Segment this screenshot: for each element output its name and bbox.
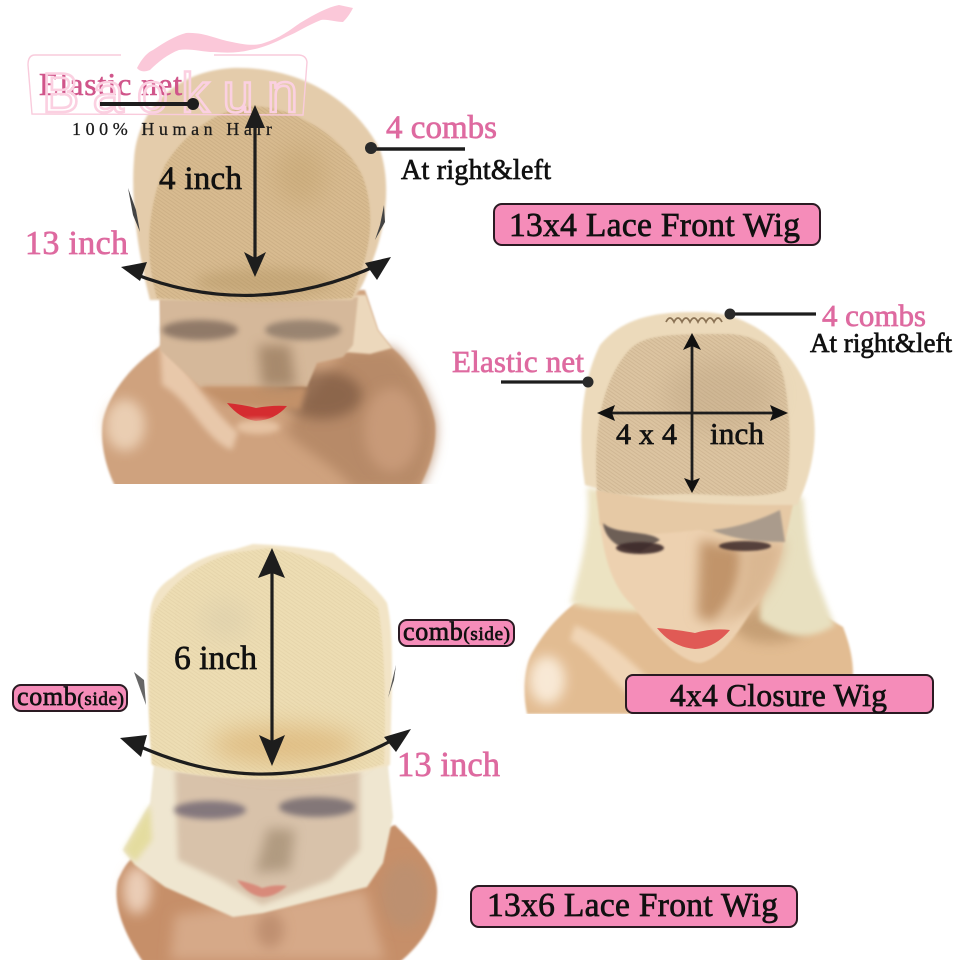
label: 4x4 Closure Wig: 4x4 Closure Wig <box>670 678 887 713</box>
arrow: 13 inch curved, 13x6 <box>120 729 411 774</box>
text: At right&left 4x4: At right&left <box>810 328 952 358</box>
text: inch: inch <box>710 416 764 451</box>
callout line: 4x4 combs <box>724 308 816 320</box>
logo swoosh <box>137 5 353 71</box>
label: 4x4 Closure Wig <box>626 675 933 713</box>
arrow: 13 inch curved <box>121 257 391 295</box>
arrow: 4x4 vertical <box>683 333 701 493</box>
icon: comb teeth <box>666 318 722 322</box>
text: At right&left: At right&left <box>401 155 551 186</box>
callout line: combs <box>365 142 465 154</box>
text: 4 x 4: 4 x 4 <box>616 418 677 451</box>
callout line: elastic net 4x4 <box>501 376 594 388</box>
text: 13 inch pink, 13x6: 13 inch <box>397 746 500 784</box>
text: 100% Human Hair: 100% Human Hair <box>72 119 272 139</box>
logo frame <box>28 55 307 115</box>
text: 4 inch: 4 inch <box>159 161 242 197</box>
label: 13x4 Lace Front Wig: 13x4 Lace Front Wig <box>509 207 800 244</box>
photo: mannequin wearing 4x4 closure wig <box>525 312 853 714</box>
text: Elastic net 4x4: Elastic net <box>452 344 584 379</box>
text: 4 combs 4x4: 4 combs <box>822 298 926 333</box>
text: 13 inch pink: 13 inch <box>25 225 128 262</box>
arrow: 6 inch vertical <box>258 548 285 766</box>
brand watermark logo <box>28 5 353 115</box>
callout line: elastic net <box>100 98 199 110</box>
text: 4 combs: 4 combs <box>386 110 497 146</box>
label: 13x6 Lace Front Wig: 13x6 Lace Front Wig <box>487 887 778 924</box>
arrow: 4x4 horizontal <box>597 405 788 421</box>
label: comb side left: comb(side) <box>17 682 124 711</box>
brand wordmark: Baokun <box>42 61 298 124</box>
heading: Elastic net callout, 13x4: Elastic net <box>39 66 182 102</box>
label: comb side right: comb(side) <box>403 617 510 646</box>
photo: mannequin wearing 13x6 lace front wig <box>117 544 437 960</box>
blonde hair beside lace <box>345 295 392 354</box>
photo: mannequin wearing 13x4 lace front wig <box>102 68 435 490</box>
text: 6 inch: 6 inch <box>174 640 257 677</box>
arrow: 4 inch vertical <box>244 105 266 277</box>
